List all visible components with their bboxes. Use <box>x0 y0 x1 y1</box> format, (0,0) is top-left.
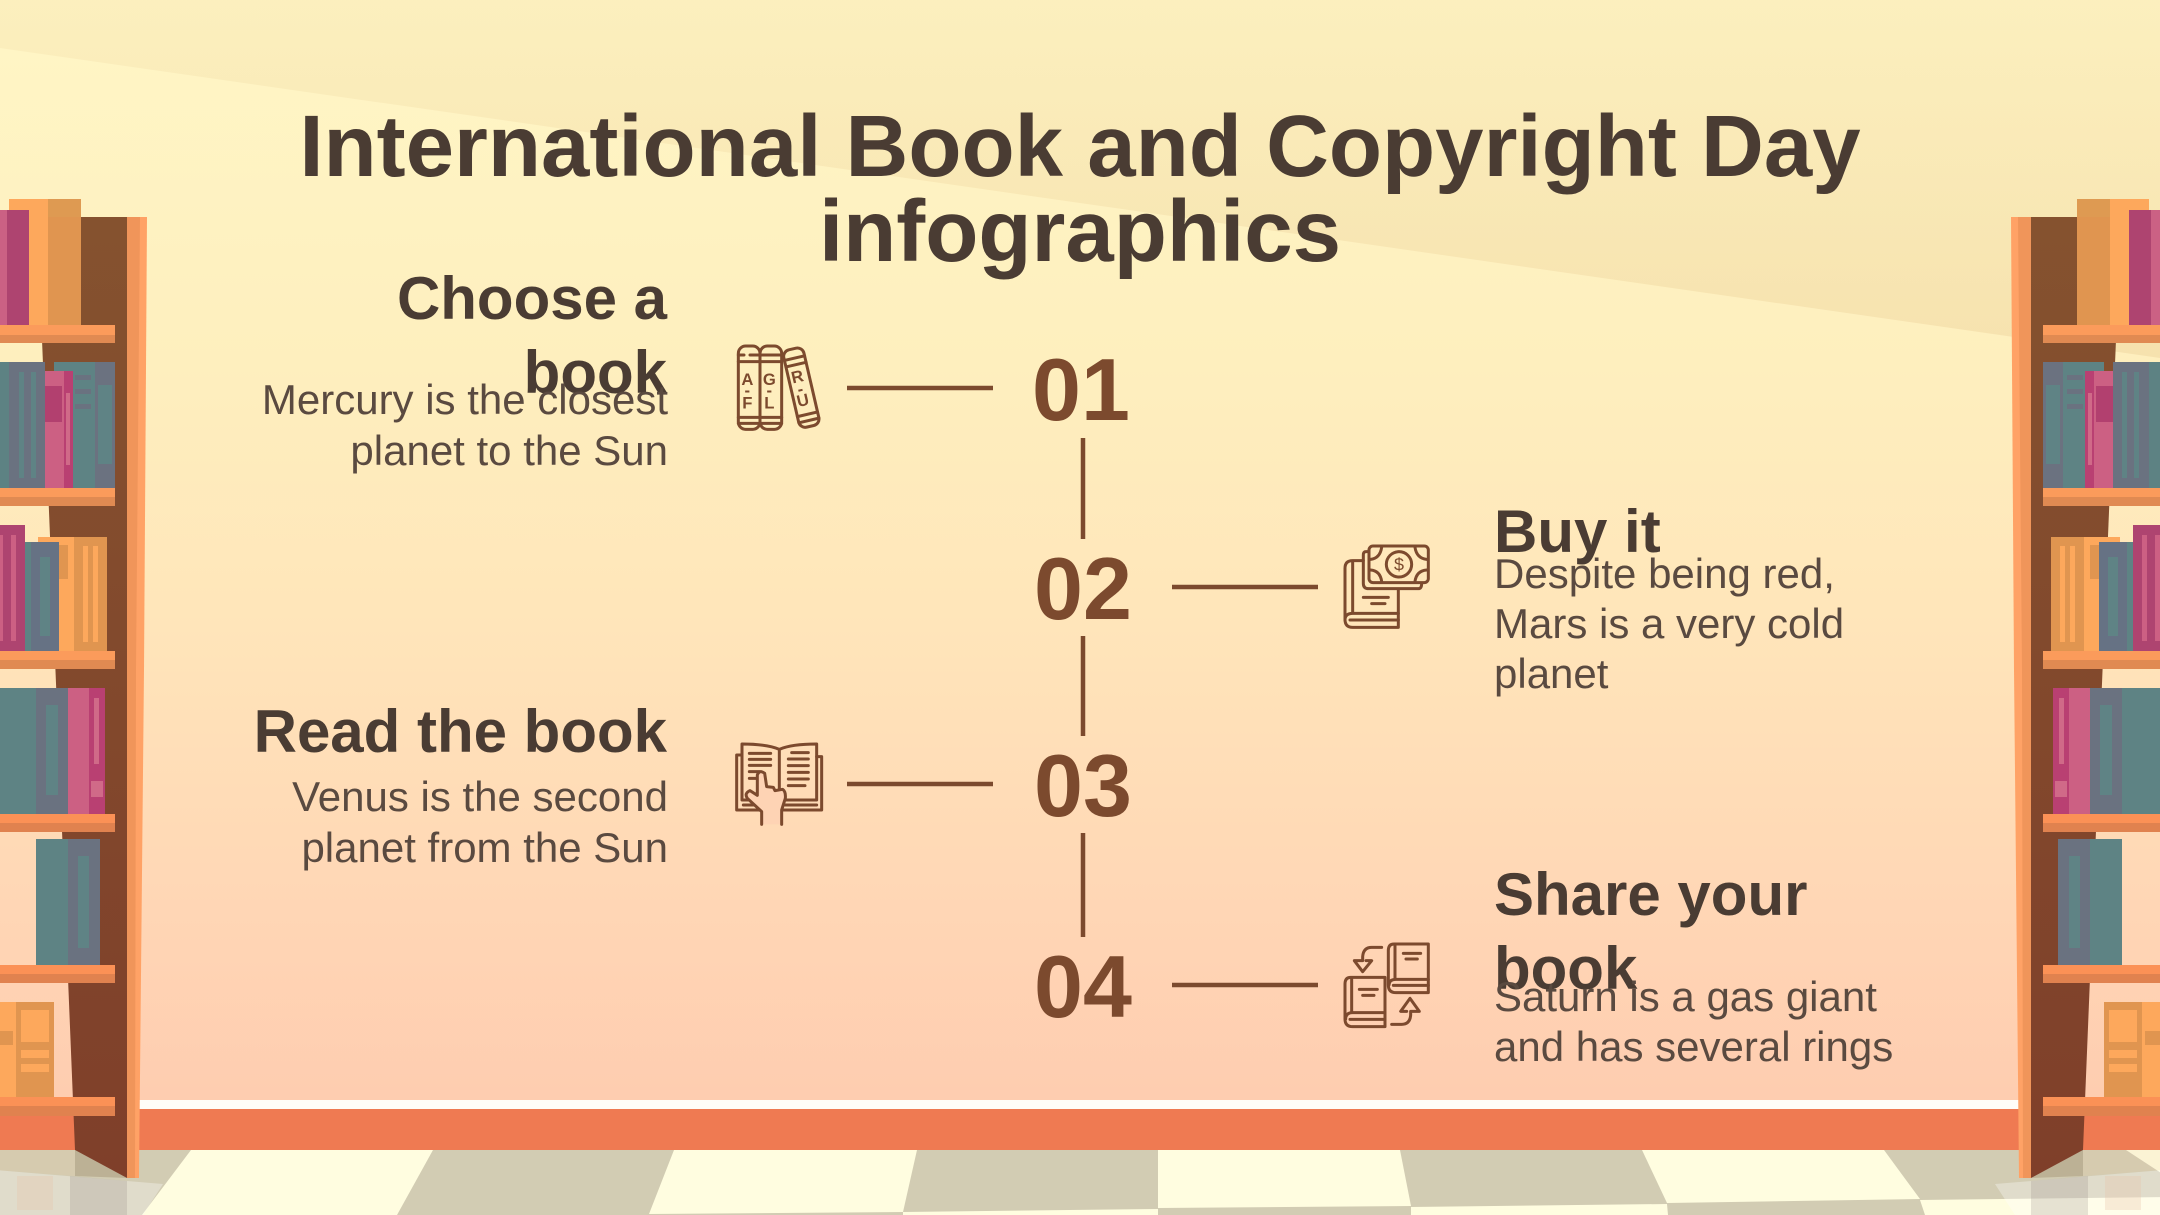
icon: exchanging books <box>1345 944 1428 1027</box>
step 2 text: buy it: Mars is a very cold <box>1494 600 1844 647</box>
icon: shelved books <box>738 346 820 429</box>
connector 1 <box>847 386 993 390</box>
step 4 text: share your book: and has several rings <box>1494 1023 1893 1070</box>
checkered floor <box>0 1150 2160 1215</box>
step 3 text: read the book: Read the book <box>254 698 668 765</box>
connector 3 <box>847 782 993 786</box>
icon: book and money <box>1345 546 1428 627</box>
vertical connector 2-3 <box>1081 636 1085 736</box>
step 2 text: buy it: Buy it <box>1494 498 1661 565</box>
step 4 text: share your book: book <box>1494 935 1638 1002</box>
step 4 text: share your book: Saturn is a gas giant <box>1494 973 1877 1020</box>
step 4 text: share your book: Share your <box>1494 861 1807 928</box>
number 01: 01 <box>1032 340 1130 439</box>
step 2 text: buy it: planet <box>1494 650 1609 697</box>
step 3 text: read the book: Venus is the second <box>292 773 668 820</box>
connector 2 <box>1172 585 1318 589</box>
vertical connector 1-2 <box>1081 438 1085 539</box>
vertical connector 3-4 <box>1081 833 1085 937</box>
step 4 text: share your book <box>1494 861 1893 1070</box>
step 3 text: read the book <box>254 698 668 871</box>
icon: book and money: $ <box>1394 555 1404 575</box>
step 1 text: choose a book <box>262 265 668 474</box>
title: infographics <box>819 183 1341 280</box>
number 04: 04 <box>1034 937 1132 1036</box>
number 03: 03 <box>1034 736 1132 835</box>
step 1 text: choose a book: Choose a <box>397 265 668 332</box>
right bookcase <box>1995 199 2160 1215</box>
baseboard <box>0 1100 2160 1150</box>
number 02: 02 <box>1034 539 1132 638</box>
step 2 text: buy it: Despite being red, <box>1494 550 1835 597</box>
title: International Book and Copyright Day <box>299 98 1861 195</box>
step 1 text: choose a book: planet to the Sun <box>350 427 668 474</box>
step 2 text: buy it <box>1494 498 1844 697</box>
icon: shelved books: R-U <box>789 366 811 411</box>
title <box>299 98 1861 280</box>
icon: shelved books: A-F <box>741 370 753 412</box>
icon: shelved books: G-L <box>763 370 776 412</box>
connector 4 <box>1172 983 1318 987</box>
step 1 text: choose a book: book <box>524 339 668 406</box>
icon: reading hand on open book <box>737 744 822 824</box>
left bookcase <box>0 199 163 1215</box>
step 3 text: read the book: planet from the Sun <box>301 824 668 871</box>
step 1 text: choose a book: Mercury is the closest <box>262 376 668 423</box>
